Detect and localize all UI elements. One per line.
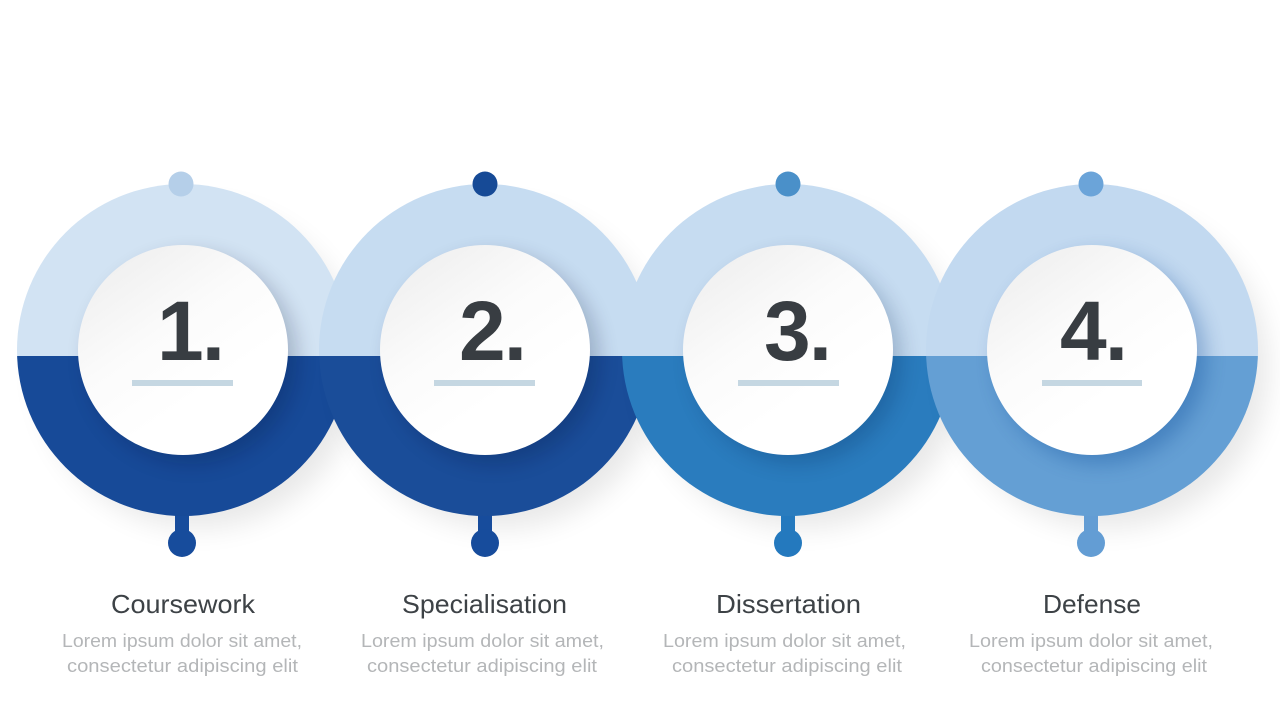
caption: Defense: consectetur adipiscing elit xyxy=(981,656,1207,676)
top connector dot 2 xyxy=(472,172,498,196)
step 4: Defense circle xyxy=(926,172,1268,557)
step 1: Coursework circle xyxy=(17,172,359,557)
caption: Defense: Lorem ipsum dolor sit amet, xyxy=(969,631,1213,651)
bottom connector 1 xyxy=(168,510,196,557)
number 1: 1. xyxy=(157,284,223,378)
caption: Coursework: Coursework xyxy=(111,589,256,619)
caption: Specialisation: Specialisation xyxy=(402,589,567,619)
number 2: 2. xyxy=(459,284,525,378)
caption: Dissertation: Lorem ipsum dolor sit amet, xyxy=(663,631,906,651)
caption: Coursework: consectetur adipiscing elit xyxy=(67,656,298,676)
underline 3 xyxy=(738,380,839,386)
inner disc 4 xyxy=(987,245,1197,455)
ring 1 xyxy=(17,184,349,518)
caption: Coursework xyxy=(62,589,302,676)
top connector dot 1 xyxy=(168,172,194,196)
caption: Dissertation: Dissertation xyxy=(716,589,861,619)
number 3: 3. xyxy=(764,284,830,378)
caption: Dissertation: consectetur adipiscing elit xyxy=(672,656,902,676)
step 2: Specialisation circle xyxy=(319,172,661,557)
caption: Dissertation xyxy=(663,589,906,676)
caption: Specialisation: Lorem ipsum dolor sit amet, xyxy=(361,631,604,651)
ring 3 xyxy=(622,184,954,518)
underline 2 xyxy=(434,380,535,386)
underline 1 xyxy=(132,380,233,386)
caption: Defense xyxy=(969,589,1213,676)
inner disc 3 xyxy=(683,245,893,455)
step 3: Dissertation circle xyxy=(622,172,964,557)
bottom connector 2 xyxy=(471,510,499,557)
bottom connector 3 xyxy=(774,510,802,557)
number 4: 4. xyxy=(1060,284,1126,378)
top connector dot 3 xyxy=(776,172,800,196)
inner disc 2 xyxy=(380,245,590,455)
ring 4 xyxy=(926,184,1258,518)
underline 4 xyxy=(1042,380,1142,386)
top connector dot 4 xyxy=(1078,172,1104,196)
bottom connector 4 xyxy=(1077,510,1105,557)
caption: Defense: Defense xyxy=(1043,589,1141,619)
caption: Specialisation: consectetur adipiscing elit xyxy=(367,656,597,676)
caption: Specialisation xyxy=(361,589,604,676)
caption: Coursework: Lorem ipsum dolor sit amet, xyxy=(62,631,302,651)
inner disc 1 xyxy=(78,245,288,455)
ring 2 xyxy=(319,184,651,518)
